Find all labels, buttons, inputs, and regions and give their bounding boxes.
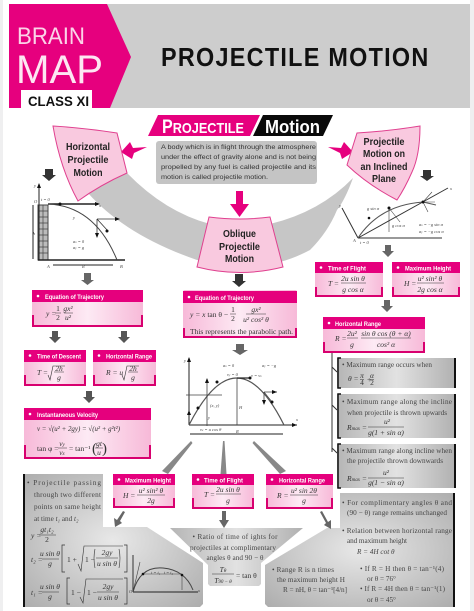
node: oblique projectile motion [197, 217, 283, 272]
panel: two points at same height: at time t₁ and t₂ [34, 515, 79, 523]
panel: horizontal range (oblique): R = [276, 491, 289, 500]
arrow: trajectory to diagram [232, 344, 248, 355]
panel: equation of trajectory (oblique): This represents the parabolic path. [190, 327, 293, 336]
box: max range downwards: • Maximum range along incline when [342, 447, 452, 455]
formula: t1: u sin θ [40, 582, 60, 591]
panel: time of descent: Time of Descent [37, 354, 82, 360]
arrow: time of flight to ratio panel [219, 511, 229, 528]
node: motion on an inclined plane: Motion on [363, 148, 405, 160]
box: max range upwards: • Maximum range along the incline [342, 398, 452, 406]
mini diagram: two projectiles: x [197, 588, 200, 593]
panel: time of descent: 2h [55, 364, 63, 373]
panel: equation of trajectory (oblique): Equation of Trajectory [195, 295, 254, 302]
arrow: to time of descent [49, 331, 61, 343]
brain map badge: MAP [16, 48, 103, 92]
panel: horizontal range (inclined): g [350, 340, 354, 349]
arrow: inclined node to diagram [420, 170, 434, 181]
formula: t1 [31, 578, 127, 604]
panel: time of descent: g [57, 373, 61, 382]
box: max range upwards: when projectile is thrown upwards [347, 409, 447, 417]
panel: maximum height [113, 474, 175, 508]
box: max range upwards [337, 394, 456, 438]
panel: instantaneous velocity: tan φ = [37, 444, 58, 453]
formula: t2: u sin θ [97, 559, 117, 568]
formula: t1: 1 − [71, 588, 81, 597]
panel: horizontal range (inclined) [323, 317, 425, 353]
panel: time of flight (inclined) [315, 262, 383, 297]
heading banner: Motion [265, 117, 320, 137]
diagram: inclined plane: g sin α [367, 206, 380, 211]
formula: t1: 1 − [87, 588, 97, 597]
arrow: to oblique motion [230, 191, 249, 217]
panel: time of flight (oblique): 2u sin θ [216, 485, 240, 494]
panel: maximum height: H = [122, 491, 135, 500]
panel: horizontal range (inclined): cos² α [377, 340, 396, 349]
panel: two points at same height: through two different [34, 491, 101, 499]
panel: maximum height (inclined): 2g cos α [417, 285, 444, 294]
arrow: range to lower panel [320, 511, 331, 529]
box: max range upwards: u² [384, 417, 391, 426]
panel: equation of trajectory (horizontal): 2 [56, 313, 60, 322]
box: maximum range occurs: 2 [370, 378, 374, 387]
box: max range downwards: u² [383, 468, 390, 477]
diagram: horizontal projectile: t = 0 [41, 197, 51, 202]
diagram: inclined plane: x [449, 186, 452, 191]
panel: range and complementary angles: (90 − θ) range remains unchanged [347, 509, 447, 517]
panel: range and complementary angles: • Relation between horizontal range [342, 527, 452, 535]
panel: ratio of time of flights: Tθ [220, 565, 227, 574]
panel: maximum height: Maximum Height [125, 478, 172, 484]
brain map badge [9, 4, 131, 109]
diagram: horizontal projectile: A [46, 264, 50, 269]
panel: time of flight (inclined): T = [328, 279, 339, 288]
node: motion on an inclined plane [347, 126, 420, 200]
diagram: inclined plane [338, 186, 452, 245]
panel: two points at same height: gt₁t₂ [40, 525, 54, 534]
arrow: to horizontal motion [121, 142, 147, 159]
formula: t1: t₁ = [31, 588, 43, 597]
panel: instantaneous velocity: gt [96, 439, 103, 448]
panel: range and complementary angles: • If R = 4H then θ = tan⁻¹(1) [360, 585, 446, 593]
heading banner [148, 115, 333, 138]
mini diagram: two projectiles: t = t₁ t = t₂ [151, 570, 174, 575]
diagram: oblique projectile: y [207, 415, 210, 420]
definition text block: motion is called projectile motion. [161, 174, 268, 181]
diagram: horizontal projectile [33, 183, 125, 269]
diagram: oblique projectile: x [295, 417, 298, 422]
box: max range downwards: Rmax = [346, 474, 367, 483]
panel: range and complementary angles: • If R = H then θ = tan⁻¹(4) [360, 565, 445, 573]
formula: t2: 1 + [67, 555, 77, 564]
panel: time of flight (inclined): 2u sin θ [341, 274, 365, 283]
title: PROJECTILE MOTION [161, 44, 428, 72]
box: max range downwards [337, 444, 456, 488]
panel: horizontal range (inclined): Horizontal Range [335, 321, 381, 328]
definition text block [156, 141, 317, 184]
diagram: horizontal projectile: y [72, 215, 75, 220]
panel: time of flight (oblique): Time of Flight [204, 478, 244, 484]
diagram: horizontal projectile: ay = g [73, 245, 85, 250]
diagram: horizontal projectile: x [98, 203, 101, 208]
panel: equation of trajectory (horizontal): gx² [63, 304, 73, 313]
arrow: oblique to trajectory [232, 274, 246, 287]
arrow: to time of flight [220, 441, 226, 474]
panel: equation of trajectory (oblique) [183, 290, 297, 338]
node: motion on an inclined plane: Projectile [364, 136, 405, 148]
arrow: to inclined motion [328, 142, 353, 159]
panel: instantaneous velocity: vx [59, 448, 66, 457]
arrow: to horizontal range [118, 331, 130, 343]
arrow: horizontal to diagram [42, 169, 56, 181]
formula: t2: t₂ = [31, 555, 43, 564]
panel: time of flight (oblique): g [226, 496, 230, 505]
mini diagram: two projectiles [129, 555, 200, 594]
arrow: to maximum height [162, 441, 192, 474]
formula: t2: g [48, 559, 52, 568]
diagram: oblique projectile: vy = 0 [227, 372, 239, 377]
panel: equation of trajectory (oblique): y = x tan θ − [189, 310, 228, 319]
node: motion on an inclined plane: an Inclined [360, 161, 408, 173]
panel: equation of trajectory (horizontal): 1 [56, 304, 60, 313]
panel: instantaneous velocity: ) [102, 441, 107, 457]
arrow: diagram to trajectory [81, 273, 94, 285]
box: max range downwards: g(1 − sin α) [368, 478, 404, 487]
panel: horizontal range (oblique): u² sin 2θ [291, 486, 317, 495]
brain map badge: BRAIN [17, 23, 85, 50]
diagram: inclined plane: A [352, 238, 356, 243]
box: maximum range occurs [337, 358, 456, 388]
box: max range upwards: Rmax = [346, 423, 367, 432]
header band [9, 4, 470, 109]
panel: equation of trajectory (horizontal) [32, 290, 143, 327]
panel: horizontal range (horizontal): 2h [129, 364, 137, 373]
panel: time of flight (inclined): g cos α [342, 285, 365, 294]
panel: instantaneous velocity: u [97, 448, 101, 457]
diagram: oblique projectile [183, 357, 298, 434]
diagram: horizontal projectile: ax = 0 [73, 239, 85, 244]
box: max range downwards: the projectile thrown downwards [347, 457, 443, 465]
panel: maximum height (inclined): H = [403, 279, 416, 288]
diagram: inclined plane: ay = −g cos α [419, 229, 444, 234]
arrow: diagram to time of flight [382, 245, 394, 257]
panel: time of descent [24, 350, 86, 386]
box: maximum range occurs: α [370, 371, 375, 380]
mini diagram: two projectiles: O [129, 589, 133, 594]
box: maximum range occurs: θ = [348, 374, 359, 383]
panel: instantaneous velocity: = tan⁻¹ [69, 444, 90, 453]
panel: time of descent: T = [37, 368, 48, 377]
panel: horizontal range (horizontal): R = u [105, 368, 123, 377]
panel: instantaneous velocity: vy [59, 439, 66, 448]
panel: range and complementary angles [265, 493, 455, 607]
panel: horizontal range (oblique) [266, 474, 333, 509]
diagram: inclined plane: t = 0 [360, 240, 370, 245]
panel: range and complementary angles: or θ = 45° [367, 596, 396, 604]
panel: ratio of time of flights [170, 528, 303, 586]
panel: horizontal range (horizontal) [93, 350, 156, 386]
formula: t2: 2gy [102, 548, 113, 557]
panel: equation of trajectory (horizontal): Equation of Trajectory [45, 294, 104, 301]
node: motion on an inclined plane: Plane [372, 173, 396, 185]
panel: range and complementary angles: or θ = 76° [367, 575, 396, 583]
panel: ratio of time of flights: angles θ and 90 − θ [206, 554, 264, 562]
node: oblique projectile motion: Motion [225, 253, 254, 265]
heading banner: PROJECTILE [162, 117, 244, 138]
panel: maximum height (inclined) [392, 262, 460, 297]
panel: ratio of time of flights: projectiles at complimentary [190, 544, 276, 552]
node: horizontal projectile motion [53, 126, 127, 201]
diagram: inclined plane: ax = −g sin α [419, 222, 444, 227]
diagram: horizontal projectile: O [34, 199, 38, 204]
formula: t2 [31, 545, 127, 572]
panel: range and complementary angles: • Range R is n times [272, 566, 334, 574]
diagram: oblique projectile: R [235, 429, 239, 434]
panel: range and complementary angles: • For complimentary angles θ and [342, 499, 452, 507]
box: maximum range occurs: π [360, 371, 364, 380]
panel: two points at same height: points on same height [34, 503, 101, 511]
diagram: oblique projectile: y [183, 358, 186, 363]
panel: equation of trajectory (oblique): u² cos² θ [243, 315, 269, 324]
panel: range and complementary angles: R = 4H cot θ [356, 548, 395, 556]
definition text block: A body which is in flight through the atmosphere [161, 144, 316, 151]
panel: equation of trajectory (oblique): 1 [231, 305, 235, 314]
panel: range and complementary angles: the maximum height H [277, 576, 345, 584]
panel: horizontal range (inclined): R = [334, 334, 347, 343]
box: max range upwards: g(1 + sin α) [368, 428, 404, 437]
panel: maximum height (inclined): Maximum Height [405, 266, 452, 272]
arrow: to horizontal range [381, 300, 393, 312]
panel: ratio of time of flights: = tan θ [236, 571, 257, 580]
panel: horizontal range (horizontal): Horizontal Range [106, 354, 152, 360]
panel: two points at same height: 2 [45, 535, 49, 544]
formula: t1: g [48, 592, 52, 601]
formula: t2: 1 − [85, 555, 95, 564]
diagram: horizontal projectile: h [33, 231, 36, 236]
panel: time of flight (oblique): T = [204, 490, 215, 499]
connector bracket [332, 353, 337, 453]
panel: instantaneous velocity: v = √(u² + 2gy) = √(u² + g²t²) [37, 424, 120, 433]
panel: equation of trajectory (horizontal): u² [65, 313, 72, 322]
panel: range and complementary angles: R = nH, θ = tan⁻¹[4/n] [283, 586, 347, 594]
panel: equation of trajectory (oblique): gx² [251, 305, 261, 314]
arrow: to instantaneous velocity [83, 391, 95, 403]
panel: range and complementary angles: and maximum height [347, 537, 407, 545]
diagram: horizontal projectile: B [120, 264, 123, 269]
arrow: to horizontal range [252, 441, 286, 474]
panel: ratio of time of flights: • Ratio of time of ights for [192, 533, 278, 541]
panel: equation of trajectory (horizontal): y = [45, 309, 56, 318]
formula: t2: u sin θ [40, 549, 60, 558]
formula: t1: u sin θ [98, 593, 118, 602]
node: horizontal projectile motion: Projectile [68, 154, 109, 166]
panel: horizontal range (inclined): sin θ cos (θ + α) [361, 329, 411, 338]
node: horizontal projectile motion: Motion [74, 167, 102, 179]
panel: horizontal range (inclined): 2u² [347, 329, 358, 338]
arrow: max height to left panel [114, 511, 125, 527]
brain map badge: CLASS XI [28, 94, 89, 109]
panel: equation of trajectory (oblique): 2 [231, 314, 235, 323]
node: oblique projectile motion: Projectile [219, 241, 260, 253]
box: maximum range occurs: 4 [360, 378, 364, 387]
diagram: oblique projectile: H [238, 405, 243, 410]
node: oblique projectile motion: Oblique [223, 228, 256, 240]
diagram: horizontal projectile: y [33, 183, 36, 188]
node: horizontal projectile motion: Horizontal [66, 141, 110, 153]
diagram: oblique projectile: (x, y) [210, 403, 220, 409]
panel: maximum height: 2g [147, 496, 155, 505]
diagram: oblique projectile: ay = −g [262, 363, 277, 368]
diagram: horizontal projectile: R [81, 264, 85, 269]
panel: two points at same height: • Projectile passing [27, 479, 101, 487]
panel: instantaneous velocity: ( [92, 441, 97, 457]
panel: time of flight (inclined): Time of Flight [328, 266, 367, 272]
diagram: inclined plane: g cos α [392, 223, 405, 228]
definition text block: under the effect of gravity alone and is not being [161, 154, 316, 161]
panel: ratio of time of flights: T90 − θ [214, 576, 232, 585]
panel: horizontal range (oblique): g [302, 496, 306, 505]
panel: maximum height: u² sin² θ [139, 486, 164, 495]
formula: t1: 2gy [103, 582, 114, 591]
panel: horizontal range (horizontal): g [131, 373, 135, 382]
diagram: inclined plane: y [338, 203, 341, 208]
gray arc band [88, 173, 353, 266]
definition text block: propelled by any fuel is called projectile and its [161, 164, 317, 171]
box: maximum range occurs: • Maximum range occurs when [342, 361, 432, 369]
diagram: oblique projectile: ax = 0 [223, 363, 235, 368]
diagram: oblique projectile: v = vx [251, 373, 262, 378]
box: maximum range occurs: + [367, 375, 371, 384]
panel: instantaneous velocity: Instantaneous Velocity [37, 412, 98, 419]
diagram: oblique projectile: vx = u cos θ [200, 427, 222, 432]
panel: instantaneous velocity [24, 408, 151, 459]
panel: time of flight (oblique) [192, 474, 254, 509]
panel: horizontal range (oblique): Horizontal Range [279, 478, 325, 484]
panel: maximum height (inclined): u² sin² θ [418, 274, 443, 283]
panel: two points at same height [23, 474, 203, 607]
panel: two points at same height: y = [30, 531, 41, 540]
